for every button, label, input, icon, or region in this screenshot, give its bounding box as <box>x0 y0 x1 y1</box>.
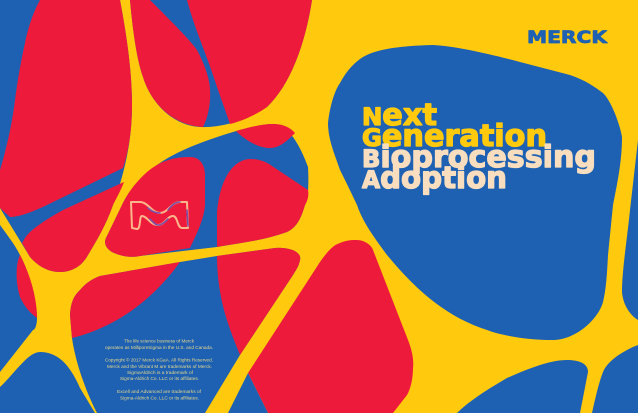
legal text block: Copyright © 2017 Merck KGaA. All Rights Reserved. <box>105 356 213 364</box>
panel: central cell <box>105 124 308 257</box>
panel: large blue title cell <box>328 45 622 340</box>
legal text block: operates as MilliporeSigma in the U.S. and Canada. <box>105 345 213 351</box>
legal text block <box>105 338 213 402</box>
legal text block: Sigma-Aldrich Co. LLC or its affiliates. <box>120 376 199 382</box>
panel: top-middle cell <box>130 0 312 127</box>
legal text block: Excell and Advanced are trademarks of <box>117 389 202 395</box>
title line: Adoption: Adoption <box>362 161 507 196</box>
panel: bottom-right centre cell <box>457 360 588 413</box>
legal text block: The life science business of Merck <box>124 338 195 344</box>
panel: bottom-centre cell <box>70 248 300 413</box>
panel: right edge cell <box>622 140 638 320</box>
legal text block: Merck and the Vibrant M are trademarks of Merck. <box>107 364 212 370</box>
title <box>362 98 596 196</box>
panel: bottom-left cell <box>0 352 95 413</box>
logo: Merck wordmark: MERCK <box>527 28 608 48</box>
panel: left cell <box>0 225 37 372</box>
panel: bottom-right corner cell <box>592 345 638 413</box>
title line: Next: Next <box>362 98 437 133</box>
panel: top-left cell <box>0 0 132 272</box>
title line: Generation: Generation <box>362 119 547 154</box>
legal text block: Sigma-Aldrich Co. LLC or its affiliates. <box>120 396 199 402</box>
icon: vibrant M logo <box>131 202 188 229</box>
panel: red bottom cell <box>228 240 413 413</box>
title line: Bioprocessing: Bioprocessing <box>362 140 596 175</box>
legal text block: SigmaAldrich is a trademark of <box>127 370 194 376</box>
